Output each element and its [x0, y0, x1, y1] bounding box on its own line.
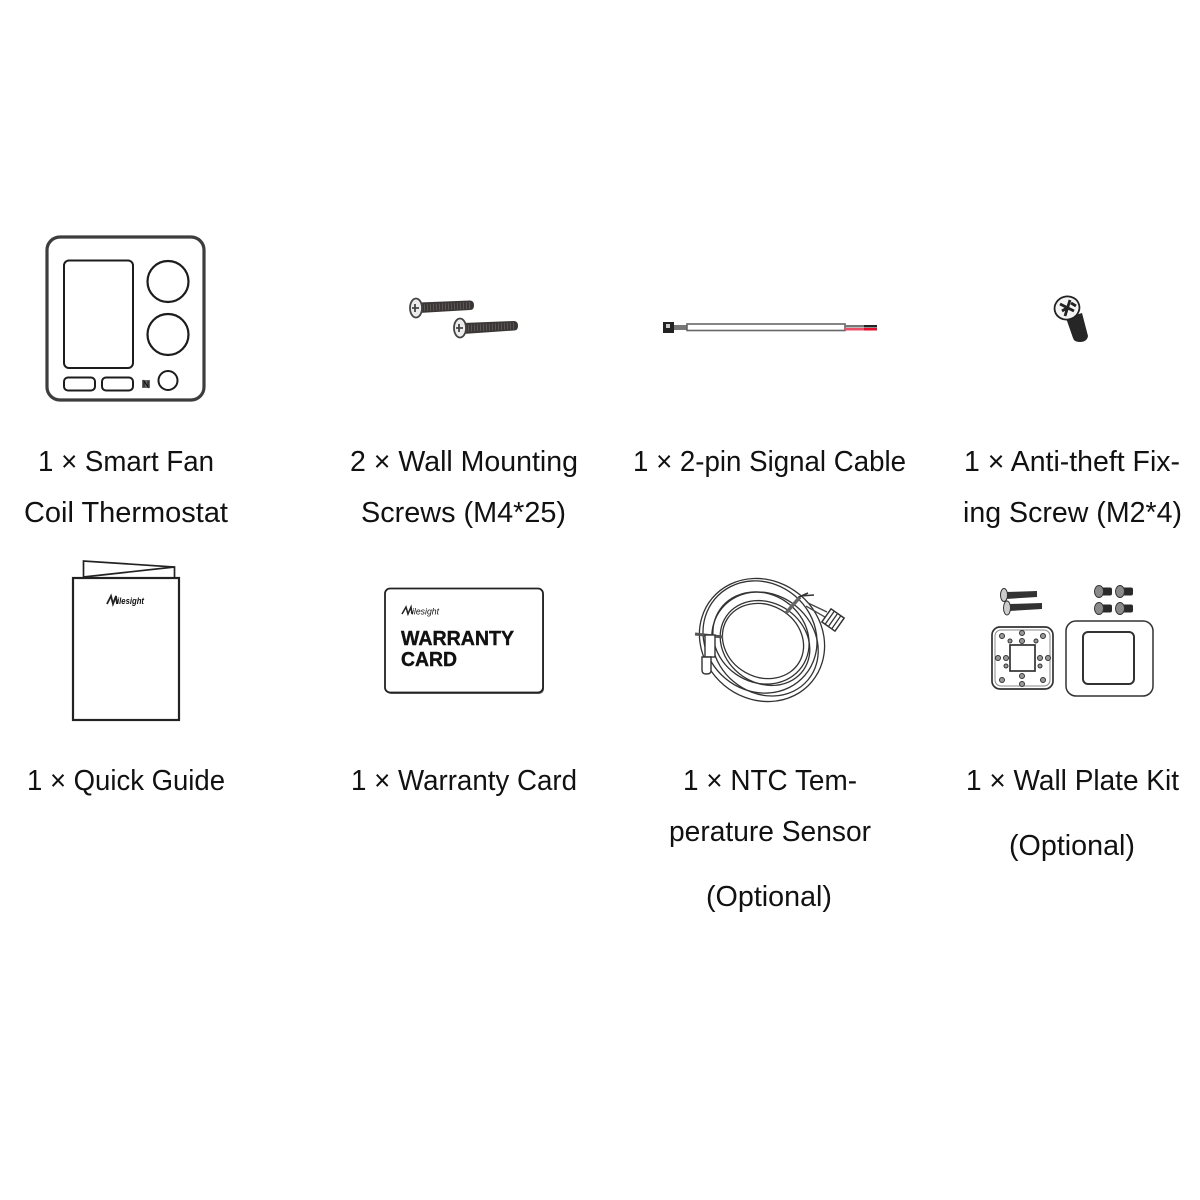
- icon: warranty card: WARRANTY: [401, 628, 515, 650]
- icon: warranty card: ilesight: [412, 606, 439, 616]
- label: NTC temperature sensor: (Optional): [706, 881, 832, 913]
- icon: anti-theft fixing screw: [1052, 294, 1088, 342]
- label: NTC temperature sensor: perature Sensor: [669, 816, 871, 848]
- label: wall plate kit: [966, 765, 1179, 862]
- label: 2-pin signal cable: 1 × 2-pin Signal Cable: [633, 446, 906, 478]
- label: smart fan coil thermostat: 1 × Smart Fan: [38, 446, 214, 478]
- icon: quick guide booklet: [73, 561, 179, 720]
- icon: NTC temperature sensor coil: [674, 553, 850, 727]
- label: wall plate kit: 1 × Wall Plate Kit: [966, 765, 1179, 797]
- label: wall mounting screws: [350, 446, 578, 529]
- icon: smart fan coil thermostat: [47, 237, 204, 400]
- icon: 2-pin signal cable: [663, 322, 877, 333]
- icon: quick guide booklet: ilesight: [117, 596, 145, 607]
- label: smart fan coil thermostat: Coil Thermostat: [24, 497, 228, 529]
- label: warranty card: 1 × Warranty Card: [351, 765, 577, 797]
- long screws: [1000, 588, 1042, 615]
- label: anti-theft fixing screw: ing Screw (M2*4): [963, 497, 1182, 529]
- icon: wall plate kit: [992, 586, 1153, 696]
- label: wall plate kit: (Optional): [1009, 830, 1135, 862]
- label: smart fan coil thermostat: [24, 446, 228, 529]
- label: wall mounting screws: Screws (M4*25): [361, 497, 566, 529]
- short screws: [1094, 586, 1133, 614]
- label: anti-theft fixing screw: [963, 446, 1182, 529]
- icon: warranty card: CARD: [401, 649, 457, 671]
- icon: warranty card: [385, 588, 544, 694]
- label: anti-theft fixing screw: 1 × Anti-theft Fix-: [964, 446, 1180, 478]
- wall plate frame: [1066, 621, 1153, 696]
- label: NTC temperature sensor: [669, 765, 871, 913]
- label: quick guide: 1 × Quick Guide: [27, 765, 225, 797]
- icon: wall mounting screws: [410, 298, 518, 338]
- label: NTC temperature sensor: 1 × NTC Tem-: [683, 765, 857, 797]
- label: wall mounting screws: 2 × Wall Mounting: [350, 446, 578, 478]
- mounting plate: [992, 627, 1053, 689]
